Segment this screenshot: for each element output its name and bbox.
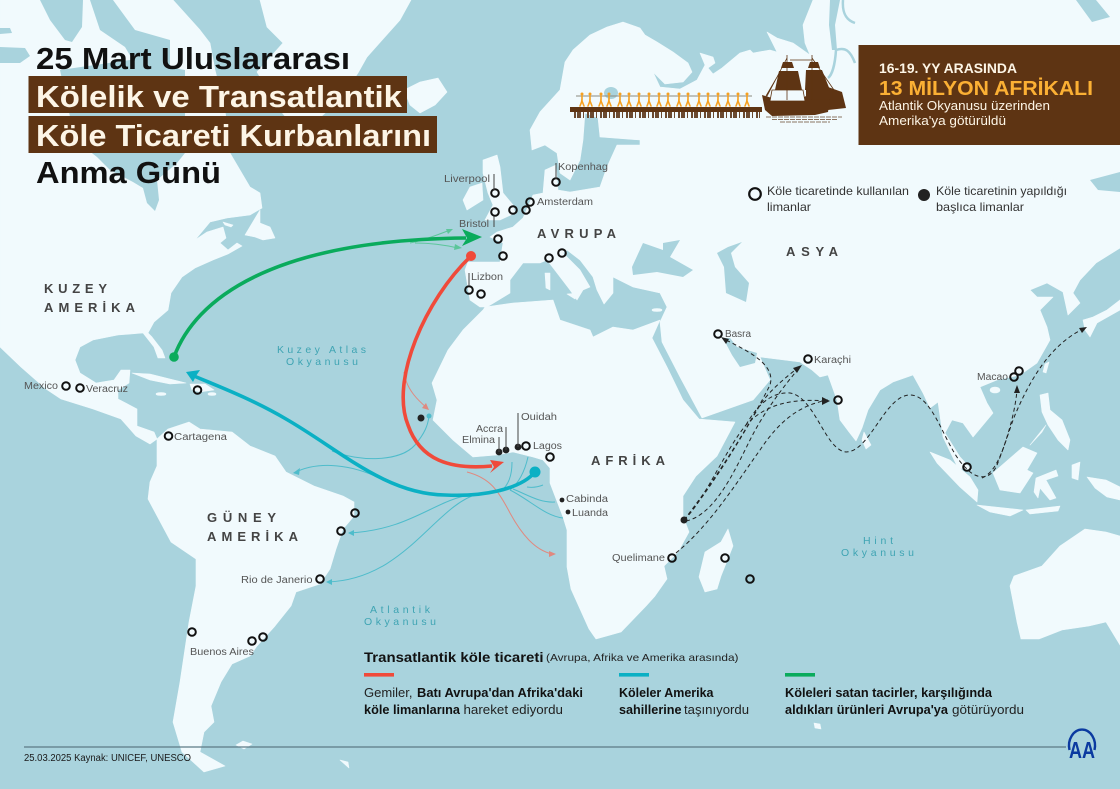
city labels: Cartagena [174,432,227,443]
continent labels: AVRUPA [537,226,617,241]
open port markers [62,178,1023,645]
thin teal branch routes [293,414,563,585]
legend: port types: limanlar [767,200,811,214]
legend: transatlantic trade: Transatlantik köle ticareti [364,649,544,665]
city labels: Amsterdam [537,197,593,208]
legend: transatlantic trade: götürüyordu [952,703,1024,717]
continent labels [44,226,839,544]
legend: transatlantic trade: sahillerine [619,703,682,717]
inland seas and arctic channels [0,0,1120,367]
title: 25 Mart Uluslararası [36,41,350,76]
icon: enslaved people walking the pier to the ship [570,92,762,115]
city labels: Rio de Janerio [241,575,313,586]
ocean labels: Hint [863,535,893,547]
footer rule [24,746,1066,748]
city labels: Veracruz [86,384,128,395]
legend: port types: Köle ticaretinin yapıldığı [936,184,1067,198]
city labels: Kopenhag [558,162,608,173]
title [28,41,437,190]
legend: port types: Köle ticaretinde kullanılan [767,184,909,198]
icon: AA logo [1069,730,1095,763]
ocean labels [277,344,914,628]
continent labels: AFRİKA [591,453,666,468]
city labels: Liverpool [444,174,490,185]
continent labels: AMERİKA [44,300,136,315]
panel: 13 million Africans [858,45,1120,145]
city labels: Lagos [533,441,562,452]
legend: transatlantic trade: Köleler Amerika [619,686,715,700]
panel: 13 million Africans: 13 MİLYON AFRİKALI [879,77,1093,100]
ocean labels: Kuzey Atlas [277,344,366,356]
continent labels: GÜNEY [207,510,276,525]
icon: AA logo: AA [1069,737,1095,763]
ocean labels: Okyanusu [286,356,358,368]
continent labels: AMERİKA [207,529,299,544]
city labels: Basra [725,329,751,340]
city labels: Elmina [462,435,495,446]
source line: 25.03.2025 Kaynak: UNICEF, UNESCO [24,753,191,764]
continent labels: ASYA [786,244,839,259]
legend: transatlantic trade: Batı Avrupa'dan Afrika'daki [417,686,583,700]
green route: Americas to Europe [169,229,482,362]
panel: 13 million Africans: Amerika'ya götürüldü [879,114,1006,128]
ocean labels: Atlantik [370,604,431,616]
city labels: Accra [476,424,503,435]
continent labels: KUZEY [44,281,107,296]
city labels: Bristol [459,219,489,230]
ocean labels: Okyanusu [364,616,436,628]
ocean labels: Okyanusu [841,547,914,559]
legend: transatlantic trade [364,649,1024,717]
legend: transatlantic trade: Gemiler, [364,686,412,700]
panel: 13 million Africans: 16-19. YY ARASINDA [879,60,1017,76]
title: Anma Günü [36,155,221,190]
city labels: Lizbon [471,272,503,283]
thin green branch routes [410,229,462,250]
legend: transatlantic trade: (Avrupa, Afrika ve Amerika arasında) [546,652,738,664]
city labels: Cabinda [566,494,608,505]
city labels: Quelimane [612,553,665,564]
title: Köle Ticareti Kurbanlarını [36,118,431,153]
city labels: Mexico [24,381,58,392]
city labels: Ouidah [521,412,557,423]
legend: port types [749,184,1067,214]
legend: transatlantic trade: hareket ediyordu [464,703,563,717]
legend: port types: başlıca limanlar [936,200,1024,214]
title: Kölelik ve Transatlantik [36,79,403,114]
city labels: Buenos Aires [190,647,254,658]
red route: Europe to Africa [403,251,504,473]
dashed routes: Indian Ocean [676,327,1087,553]
legend: transatlantic trade: taşınıyordu [684,703,749,717]
legend: transatlantic trade: köle limanlarına [364,703,461,717]
legend: transatlantic trade: aldıkları ürünleri Avrupa'ya [785,703,949,717]
thin red branch routes [404,372,556,557]
teal route: Africa to Americas [186,370,540,495]
panel: 13 million Africans: Atlantik Okyanusu üzerinden [879,99,1050,113]
legend: transatlantic trade: Köleleri satan tacirler, karşılığında [785,686,993,700]
city labels [24,162,1008,658]
city labels: Luanda [572,508,608,519]
main port markers and leader lines [418,163,570,514]
icon: slave ship [762,55,846,122]
city labels: Macao [977,372,1008,383]
city labels: Karaçhi [814,355,851,366]
